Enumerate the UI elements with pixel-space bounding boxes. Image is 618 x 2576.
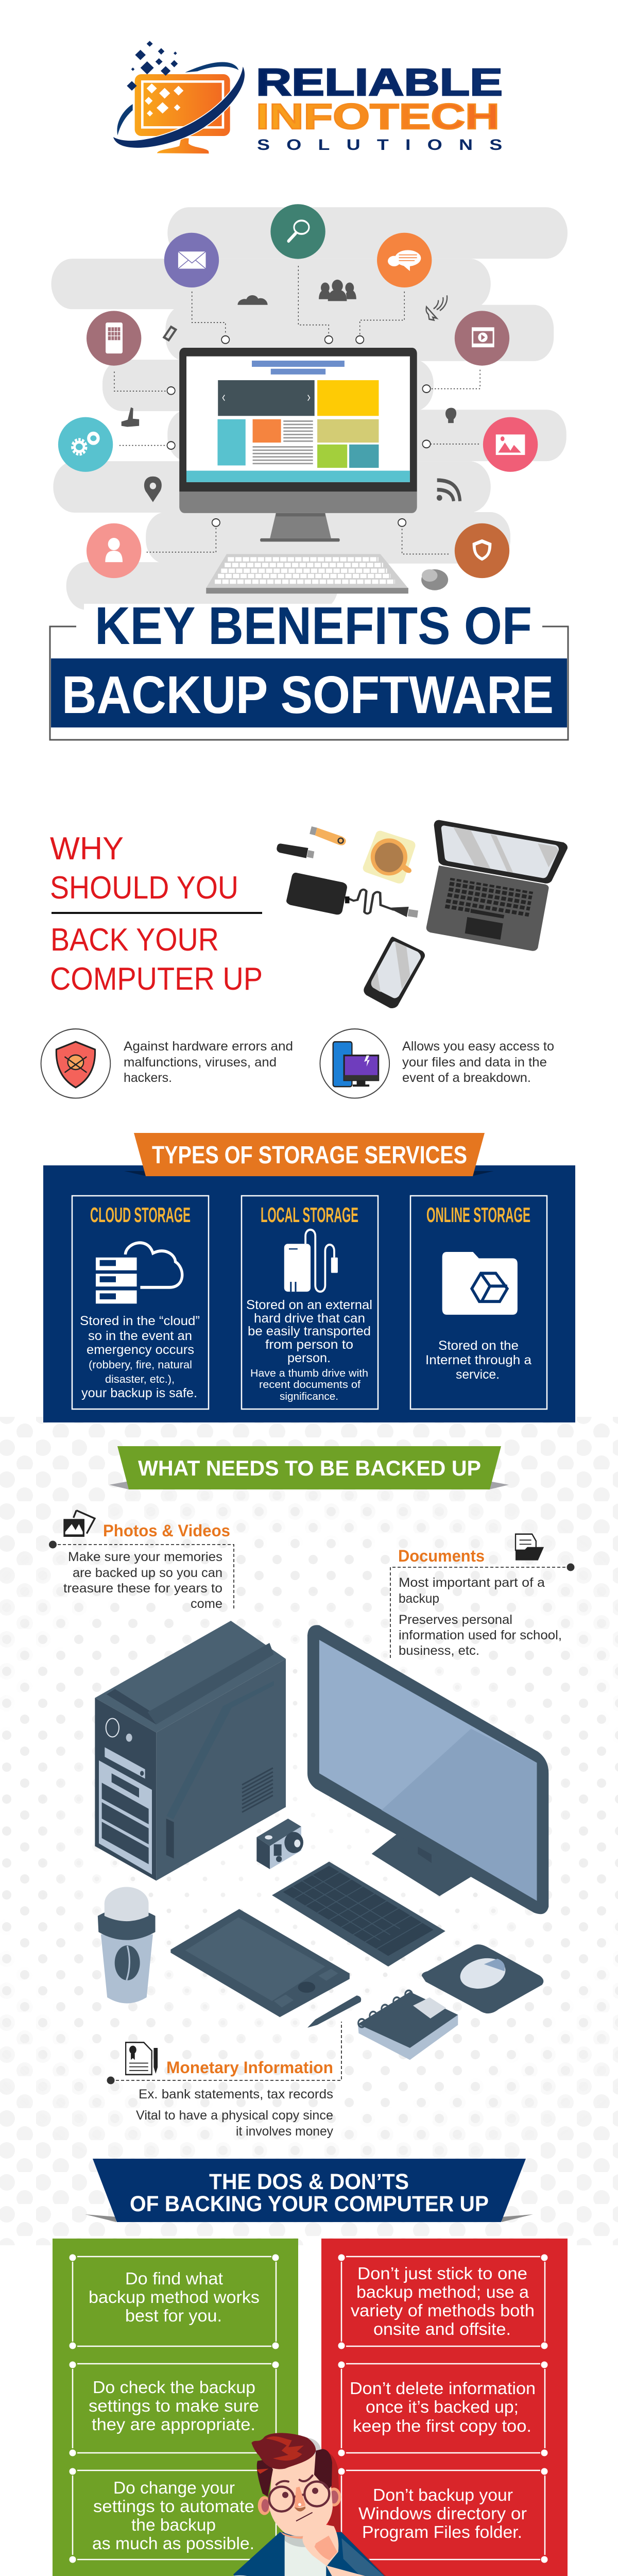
left sleeve and arm [215,2575,259,2576]
do 1 [89,2269,260,2325]
computer tower [95,1621,286,1880]
devices illustration: laptop, drive, usb sticks, phone, coffee [277,820,568,1008]
heading: why should you back your computer up: SHOULD YOU [50,870,238,906]
laptop [426,820,568,951]
hand on chin [302,2519,390,2576]
dotted connectors [114,266,480,554]
nose [295,2487,305,2508]
monitor [307,1625,548,1914]
illustration: isometric desktop setup [95,1621,548,2060]
card: online storage: Internet through a [425,1353,531,1367]
icon: shield circle [455,523,509,578]
mouse [421,569,448,590]
hero grey blob background [51,207,568,610]
don't 1: Don’t just stick to one [357,2264,527,2283]
don't boxes frames [341,2257,545,2560]
card: online storage: ONLINE STORAGE [426,1203,530,1227]
ears [258,2496,271,2515]
do 2 [89,2378,259,2434]
card: cloud storage: emergency occurs [87,1343,194,1357]
icon: picture circle [483,417,538,472]
callout: monetary information: Ex. bank statements, tax records [139,2087,333,2102]
callout: monetary information: Vital to have a physical copy since [136,2108,333,2123]
don't 2: once it’s backed up; [366,2397,519,2416]
callout: documents: Documents [398,1547,485,1565]
benefit: access after a breakdown: your files and data in the [402,1055,547,1070]
card: local storage: significance. [280,1391,338,1402]
icon: chat circle [377,233,432,287]
callout: photos and videos: come [191,1597,222,1611]
callout: photos and videos [49,1511,234,1611]
banner: the dos and don'ts [85,2159,533,2222]
icon: skull shield [41,1029,110,1098]
title band: BACKUP SOFTWARE [62,665,554,724]
character: thinking man with glasses [215,2433,403,2576]
do 2: Do check the backup [93,2378,255,2397]
do boxes frames [73,2257,276,2560]
card: cloud storage: so in the event an [88,1329,192,1343]
do 2: they are appropriate. [92,2415,255,2434]
card: local storage [242,1196,378,1409]
icon: tablet circle [87,311,141,366]
benefit: protection against errors and viruses [41,1029,293,1098]
panel: types of storage services [43,1133,575,1422]
don't 2: Don’t delete information [350,2379,536,2398]
logo wordmark [256,61,503,154]
icon: cloud server [96,1243,182,1303]
heading: why should you back your computer up: COMPUTER UP [50,961,263,997]
banner: types of storage services [134,1133,485,1176]
do 3: settings to automate [93,2497,254,2516]
card: local storage: hard drive that can [254,1311,365,1326]
callout: photos and videos: are backed up so you can [73,1566,222,1580]
benefit: access after a breakdown: Allows you easy access to [402,1039,554,1054]
stylus [307,1995,361,2028]
benefit: access after a breakdown [320,1029,554,1098]
icon: photos [63,1511,95,1537]
benefit: protection against errors and viruses: hackers. [124,1071,172,1085]
dotted background pattern [0,1417,618,2245]
panel: dos [53,2239,298,2576]
jacket [233,2532,388,2576]
card: local storage: Have a thumb drive with [250,1368,368,1379]
heading: why should you back your computer up: BACK YOUR [50,922,219,958]
callout: monetary information [107,2022,341,2139]
callout: monetary information: Monetary Information [166,2058,333,2077]
don't 3 [358,2485,527,2541]
icon: film circle [455,311,509,366]
camera [256,1819,303,1869]
hero: computer with connected app icons [51,204,568,610]
don't 1 [351,2264,535,2338]
card: online storage [410,1196,547,1409]
icon: broken computer [320,1029,389,1098]
heading: why should you back your computer up: WHY [50,831,124,867]
do 1: Do find what [125,2269,223,2288]
mouth [296,2513,313,2521]
usb stick black [277,843,314,858]
card: local storage: recent documents of [259,1379,360,1391]
logo wordmark: INFOTECH [256,96,500,137]
card: cloud storage: Stored in the “cloud” [80,1314,200,1328]
banner: what needs to be backed up [109,1446,509,1489]
card: cloud storage: (robbery, fire, natural [89,1359,192,1371]
banner: the dos and don'ts: THE DOS & DON’TS [209,2170,409,2194]
coffee on coaster [363,831,415,884]
callout: photos and videos: Photos & Videos [103,1521,230,1540]
do 1: best for you. [125,2306,222,2325]
card: cloud storage [72,1196,209,1409]
face [269,2454,333,2536]
icon: certificate [126,2042,158,2075]
drawing tablet [170,1909,350,2017]
card: local storage: person. [287,1351,331,1365]
external hard drive and cable [286,873,418,918]
card: local storage: LOCAL STORAGE [261,1203,358,1227]
do 3: as much as possible. [92,2534,254,2553]
card: online storage: Stored on the [438,1338,519,1353]
callout: monetary information: it involves money [236,2124,333,2139]
logo wordmark: RELIABLE [256,61,503,104]
do 2: settings to make sure [89,2396,259,2415]
banner: types of storage services: TYPES OF STORAGE SERVICES [152,1142,467,1169]
don't 1: variety of methods both [351,2301,535,2320]
icon: drive folder [442,1252,518,1315]
card: cloud storage: disaster, etc.), [105,1374,175,1385]
don't 2 [350,2379,536,2435]
shadows [316,2451,393,2576]
cup [98,1887,156,2003]
benefit: protection against errors and viruses: malfunctions, viruses, and [124,1055,277,1070]
do 3: the backup [131,2515,216,2534]
icon: portable drive [284,1230,338,1292]
keyboard [206,554,408,594]
mouse pad and mouse [422,1944,543,2013]
card: local storage: be easily transported [248,1324,371,1338]
callout: documents [390,1534,575,1658]
don't 1: onsite and offsite. [373,2319,511,2338]
small grey decorative icons [122,280,460,502]
don't 3: Program Files folder. [362,2522,522,2541]
card: cloud storage: CLOUD STORAGE [90,1203,191,1227]
card: local storage: Stored on an external [246,1298,372,1312]
title line 1: KEY BENEFITS OF [95,596,532,655]
benefit: access after a breakdown: event of a breakdown. [402,1071,531,1085]
hair [314,2449,332,2490]
monitor [179,348,417,541]
logo [113,41,503,154]
callout: documents: Preserves personal [399,1613,512,1627]
keyboard [272,1861,445,1967]
card: local storage: from person to [265,1337,353,1352]
icon: mail circle [164,233,219,287]
card: online storage: service. [456,1367,500,1382]
callout: photos and videos: Make sure your memories [68,1550,222,1564]
callout: documents: business, etc. [399,1643,479,1658]
icon: gears circle [58,417,113,472]
heading: why should you back your computer up [50,831,263,997]
logo wordmark: SOLUTIONS [257,136,502,154]
icon: search circle [270,204,325,259]
do 3: Do change your [113,2478,235,2497]
banner: the dos and don'ts: OF BACKING YOUR COMPUTER UP [130,2192,489,2216]
icon: user circle [87,523,141,578]
banner: what needs to be backed up: WHAT NEEDS TO BE BACKED UP [138,1456,481,1480]
shirt [285,2540,326,2576]
title block [50,596,568,740]
do 3 [92,2478,254,2553]
callout: photos and videos: treasure these for years to [63,1581,222,1596]
callout: documents: backup [399,1591,439,1606]
don't 1: backup method; use a [356,2282,529,2301]
icon: folder with documents [516,1534,544,1561]
card: cloud storage: your backup is safe. [81,1386,197,1400]
benefit: protection against errors and viruses: Against hardware errors and [124,1039,293,1054]
don't 3: Don’t backup your [373,2485,513,2504]
don't 3: Windows directory or [358,2504,527,2523]
callout: documents: information used for school, [399,1628,562,1642]
logo emblem: monitor with swoosh [113,41,245,154]
panel: don'ts [321,2239,568,2576]
notebook [358,1990,458,2060]
glasses [269,2482,329,2512]
usb stick orange [310,826,346,845]
don't 2: keep the first copy too. [353,2416,531,2435]
callout: documents: Most important part of a [399,1575,545,1590]
phone [364,937,425,1008]
do 1: backup method works [89,2287,260,2307]
